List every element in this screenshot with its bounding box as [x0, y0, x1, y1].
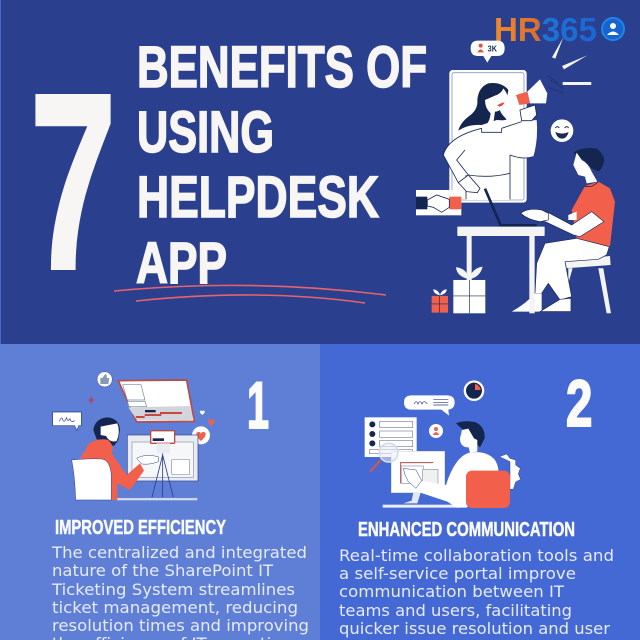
woman [443, 83, 537, 200]
logo: HR365: HR365 [494, 11, 597, 48]
body text: Ticketing System streamlines [51, 580, 295, 599]
title: HELPDESK [137, 165, 379, 230]
gear [499, 454, 521, 489]
title [136, 35, 427, 296]
chair [72, 459, 111, 500]
title: BENEFITS OF [137, 35, 427, 100]
title: APP [136, 231, 227, 296]
panel text: benefit 2 [339, 519, 614, 638]
gift box large [453, 267, 485, 313]
form card [365, 417, 417, 457]
illustration: marketing woman and seated man [416, 37, 615, 313]
heading: improved efficiency: IMPROVED EFFICIENCY [55, 517, 226, 539]
body text: Real-time collaboration tools and [339, 546, 614, 565]
megaphone [516, 76, 563, 105]
floating timeline window [118, 380, 194, 422]
panel: benefit 1 background [0, 344, 320, 640]
magnifying glass [370, 443, 398, 472]
body text: resolution times and improving [52, 616, 309, 635]
title: USING [137, 100, 274, 165]
title underline strokes [114, 285, 386, 303]
speech bubble 3K [471, 41, 505, 63]
screen frame [449, 70, 527, 203]
man with chair [403, 421, 510, 508]
monitor [127, 435, 198, 481]
user icon [429, 424, 443, 438]
desk [457, 227, 545, 281]
thumbs up icon [97, 372, 112, 387]
panel: header background [0, 0, 640, 344]
pie chart icon [464, 380, 484, 401]
monitor [383, 451, 459, 508]
desk [117, 498, 197, 500]
seated man [512, 148, 615, 313]
sparkle [88, 396, 95, 404]
body text: ticket management, reducing [52, 598, 298, 617]
gift box small [432, 289, 448, 313]
numeral 2: 2 [566, 367, 592, 441]
body text: teams and users, facilitating [339, 601, 572, 620]
illustration: benefit 1 woman at monitor [53, 372, 215, 500]
stool [565, 256, 611, 313]
phone on tripod [151, 431, 175, 497]
numeral 1: 1 [247, 369, 269, 443]
hearts [192, 411, 215, 444]
body text: quicker issue resolution and user [339, 619, 610, 638]
speech bubble 3K: 3K [488, 45, 497, 54]
body text: nature of the SharePoint IT [52, 561, 273, 580]
panel: benefit 2 background [320, 344, 640, 640]
large numeral 7: 7 [30, 43, 116, 322]
body text: communication between IT [339, 582, 564, 601]
speech bubble [404, 395, 455, 416]
body text [339, 546, 614, 638]
chat bubble [53, 412, 81, 431]
panel text: benefit 1 [51, 517, 309, 640]
illustration: benefit 2 man at computer [365, 380, 521, 508]
body text [51, 543, 309, 640]
sound rays [552, 37, 591, 85]
body text: The centralized and integrated [51, 543, 307, 562]
smiley icon [551, 119, 573, 142]
handshake card [416, 190, 461, 215]
body text: a self-service portal improve [339, 564, 576, 583]
woman in hoodie [80, 417, 158, 500]
laptop [485, 189, 537, 225]
